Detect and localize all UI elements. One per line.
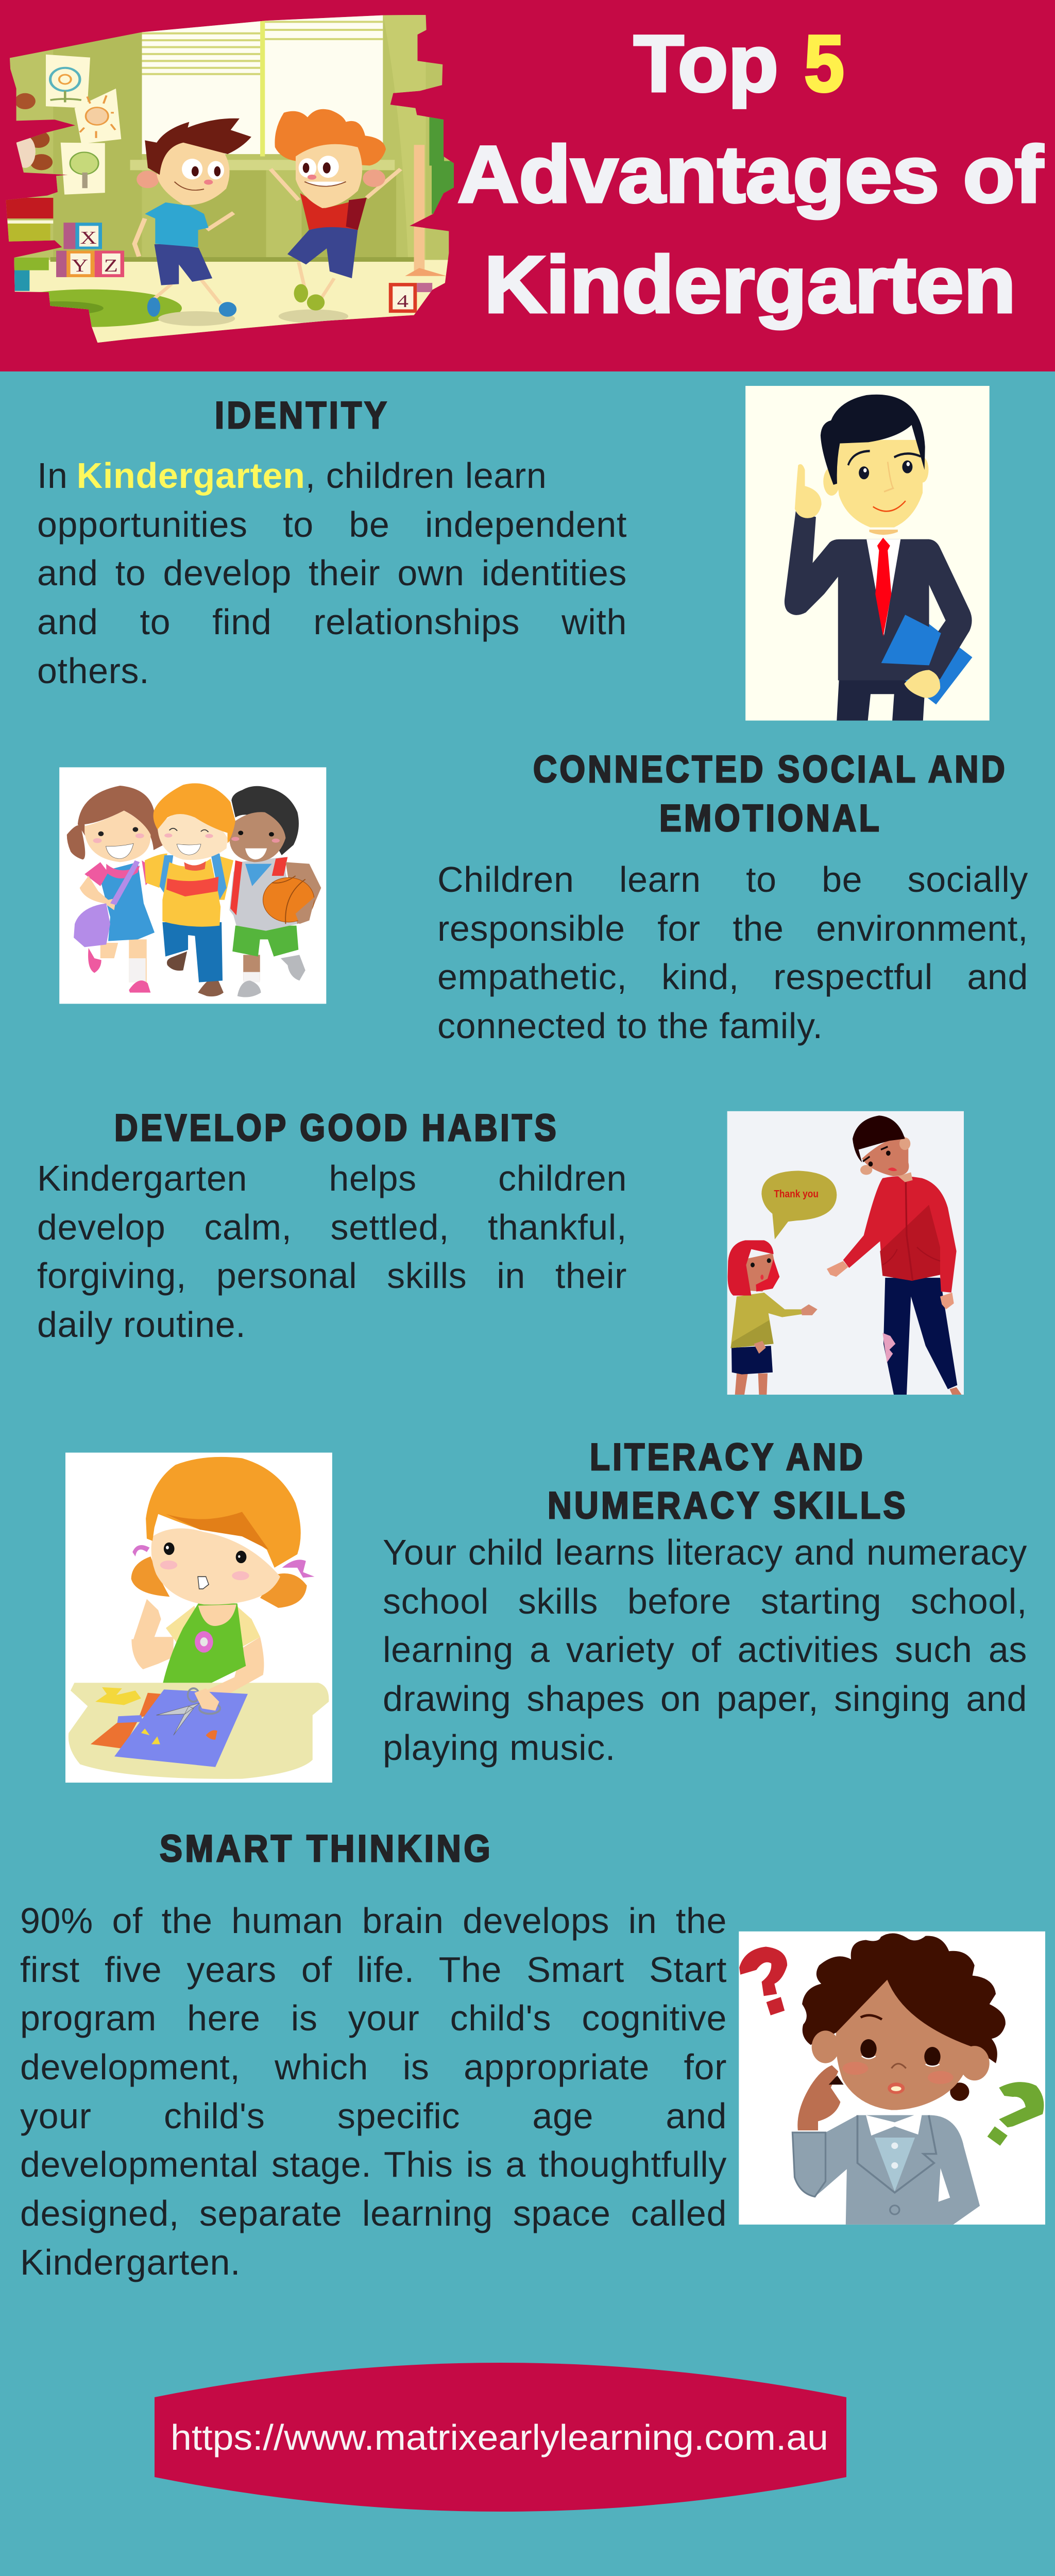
text block: identity [37,455,627,691]
title: Top [634,19,778,109]
text block: develop good habits: daily routine. [37,1304,246,1345]
girl body [131,1599,264,1707]
text block: literacy and numeracy skills: drawing shapes on paper, singing and [383,1679,1027,1719]
text block: connected social and emotional: Children learn to be socially [437,859,1028,900]
heading: literacy and numeracy skills [548,1436,908,1527]
text block: smart thinking: development, which is appropriate for [20,2047,727,2087]
text block: literacy and numeracy skills: school skills before starting school, [383,1581,1027,1621]
illustration: man in a suit pointing up [745,386,990,721]
girl [67,786,163,993]
illustration: thinking woman with question marks [739,1931,1045,2225]
heading: develop good habits: DEVELOP GOOD HABITS [114,1107,559,1149]
text block: connected social and emotional: connected to the family. [437,1006,823,1046]
text block: connected social and emotional: responsible for the environment, [437,908,1028,948]
text block: smart thinking: 90% of the human brain develops in the [20,1901,727,1941]
website url: https://www.matrixearlylearning.com.au [171,2417,828,2458]
text block: connected social and emotional: empathetic, kind, respectful and [437,957,1028,997]
text block: connected social and emotional [437,859,1028,1046]
face, ears and hand [797,1980,990,2130]
man [827,1115,962,1395]
heading: smart thinking: SMART THINKING [160,1828,493,1870]
boy with orange hair [270,109,401,323]
heading: literacy and numeracy skills: NUMERACY SKILLS [548,1485,908,1527]
footer website banner [155,2363,846,2512]
boy in the middle [145,783,239,996]
hair [802,1934,1006,2101]
window [130,14,395,170]
title: Advantages of [457,130,1044,219]
text block: smart thinking: Kindergarten. [20,2242,241,2282]
pigtails and bows [131,1545,314,1608]
banner shape [155,2363,846,2512]
panel: literacy and numeracy skills [65,1436,1027,1783]
title [457,19,1044,330]
question marks [739,1947,1044,2146]
text block: develop good habits: forgiving, personal skills in their [37,1256,627,1296]
alphabet blocks: Z [104,256,118,276]
illustration: three children walking together [59,767,326,1004]
text block: develop good habits [37,1158,627,1345]
text block: literacy and numeracy skills: Your child learns literacy and numeracy [383,1532,1027,1572]
text block: identity: and to develop their own identities [37,553,627,593]
suit [792,2112,980,2225]
drawings on the wall [46,55,121,195]
text block: identity: InKindergarten, children learn [37,455,547,496]
title: Kindergarten [484,240,1016,330]
rug [40,290,182,327]
heading: connected social and emotional: EMOTIONAL [659,798,882,839]
title: 5 [804,19,844,109]
panel: develop good habits [37,1107,964,1395]
text block: develop good habits: develop calm, settled, thankful, [37,1207,627,1247]
text block: identity: others. [37,651,149,691]
text block: smart thinking: developmental stage. This is a thoughtfully [20,2144,727,2184]
alphabet blocks [56,223,432,313]
alphabet blocks: 4 [397,291,409,311]
alphabet blocks: Y [72,256,88,276]
teddy bear and shelf [6,93,53,291]
heading: connected social and emotional [533,749,1008,839]
boy with brown hair [134,118,251,326]
text block: smart thinking [20,1901,727,2282]
header banner [0,0,1055,371]
text block: literacy and numeracy skills: playing music. [383,1727,616,1768]
illustration: girl cutting paper with scissors [65,1453,332,1783]
panel: connected social and emotional [59,749,1028,1046]
table [69,1683,329,1779]
speech bubble [761,1171,837,1240]
papers and scissors [91,1687,248,1767]
girl [728,1240,818,1395]
text block: literacy and numeracy skills: learning a variety of activities such as [383,1630,1027,1670]
lamp and plants [405,117,454,276]
panel: identity [37,386,990,721]
text block: smart thinking: first five years of life. The Smart Start [20,1950,727,1990]
speech bubble: Thank you [774,1188,819,1199]
text block: identity: and to find relationships with [37,602,627,642]
heading: literacy and numeracy skills: LITERACY AND [590,1436,865,1478]
illustration: two boys playing in a classroom [6,15,454,343]
head [151,1529,280,1605]
text block: literacy and numeracy skills [383,1532,1027,1768]
heading: identity: IDENTITY [215,395,389,436]
alphabet blocks: X [80,228,97,248]
text block: develop good habits: Kindergarten helps children [37,1158,627,1198]
boy with the basketball [229,786,321,997]
text block: smart thinking: program here is your child's cognitive [20,1998,727,2038]
text block: identity: opportunities to be independent [37,504,627,545]
text block: smart thinking: designed, separate learning space called [20,2193,727,2233]
text block: smart thinking: your child's specific age and [20,2096,727,2136]
panel: smart thinking [20,1828,1045,2282]
illustration: girl thanking a man [727,1111,964,1395]
